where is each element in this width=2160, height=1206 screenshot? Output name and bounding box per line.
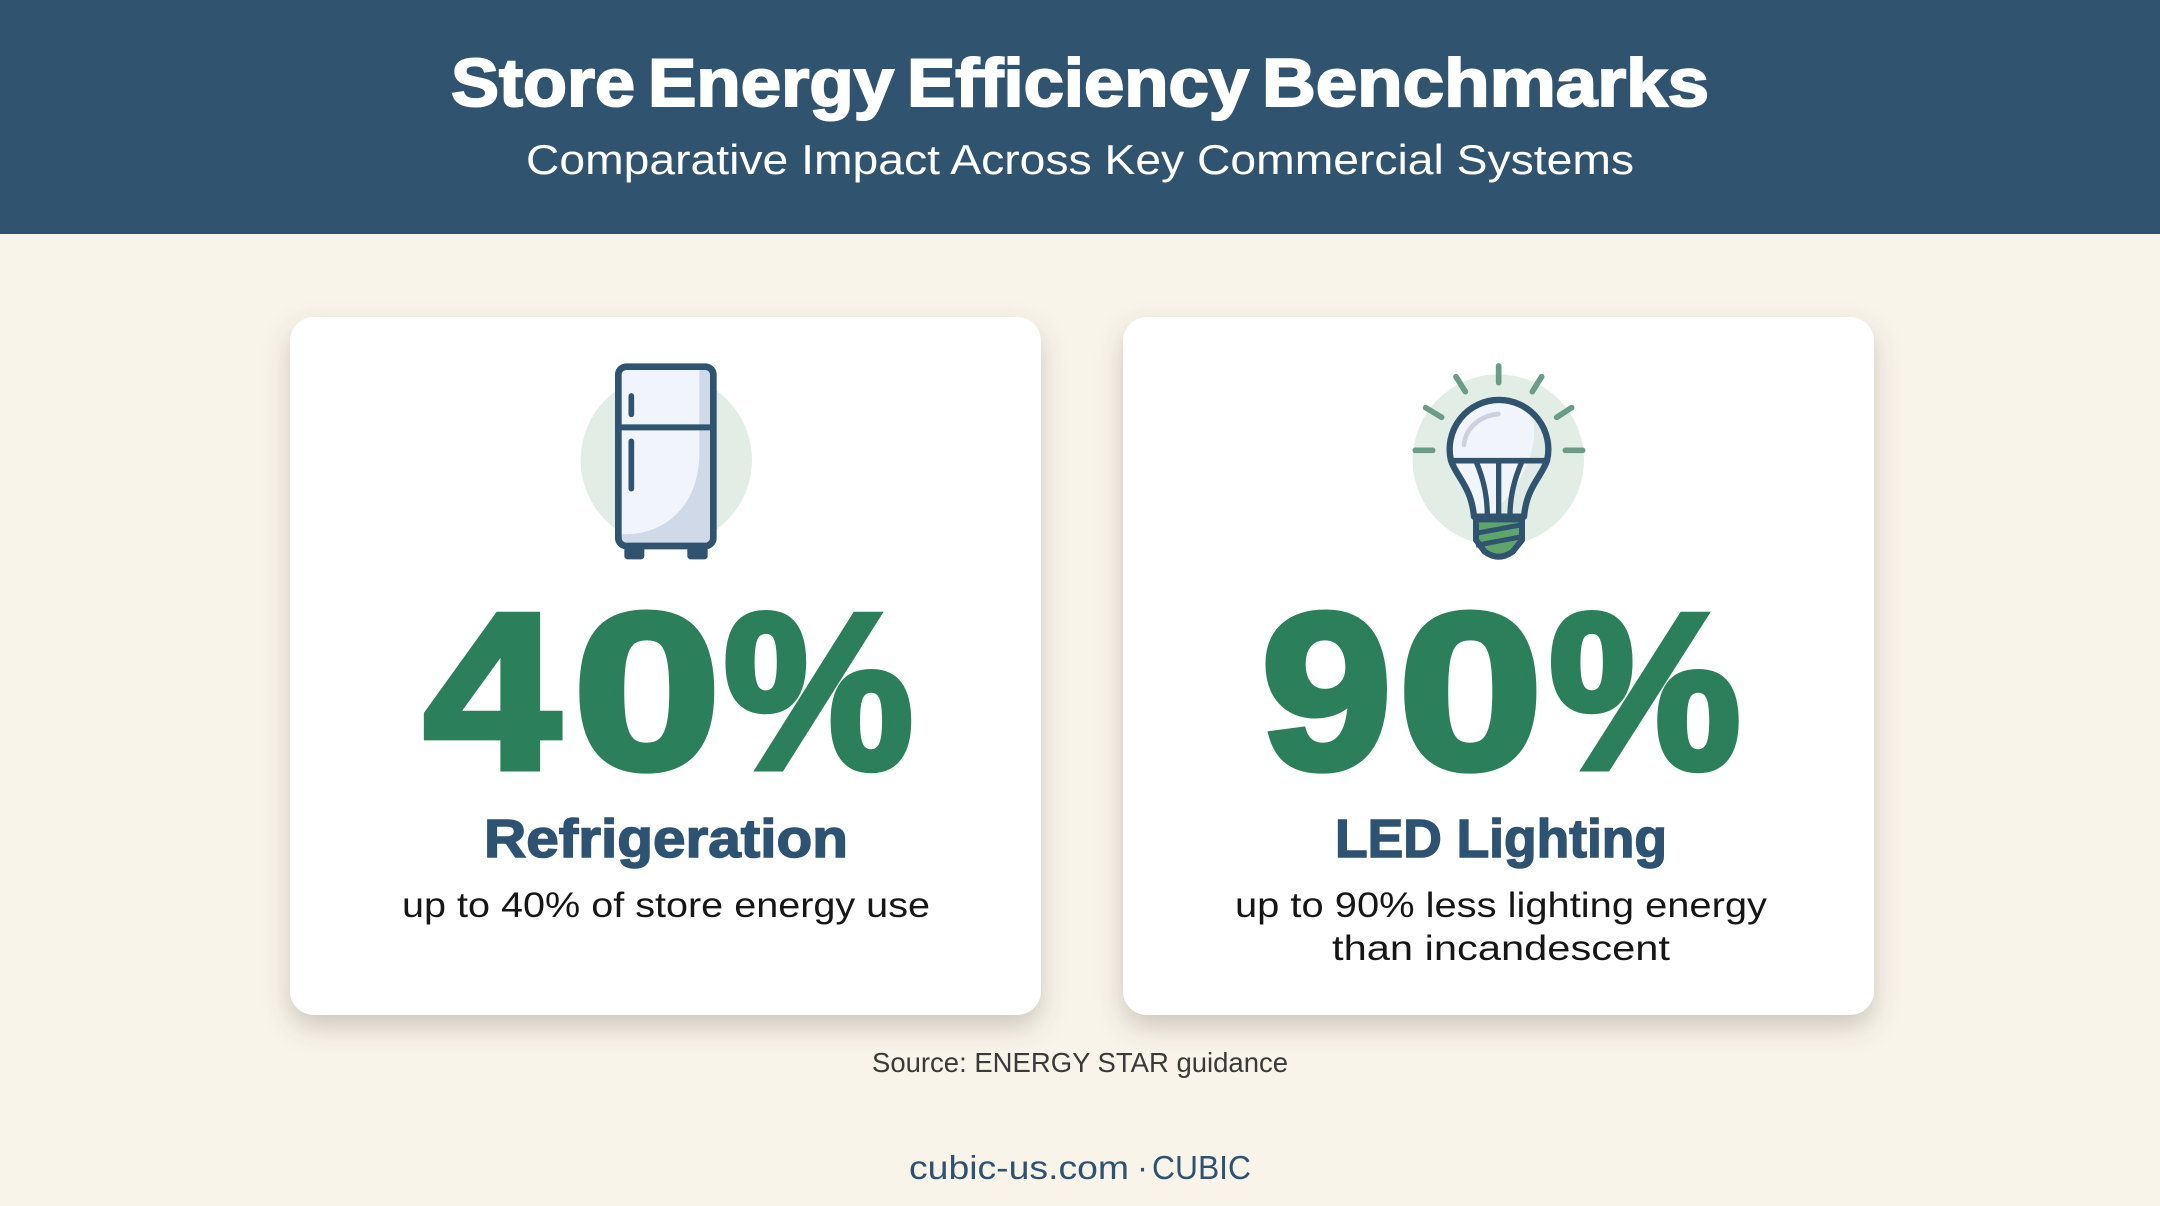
icon: light bulb (1413, 366, 1584, 557)
description: up to 90% less lighting energy (1235, 886, 1768, 925)
big number 40%: 0 (573, 568, 721, 816)
footer: · (1137, 1149, 1148, 1186)
footer: cubic-us.com (909, 1149, 1129, 1186)
title: Benchmarks (1262, 45, 1709, 121)
big number 90%: 9 (1261, 568, 1392, 816)
footer: CUBIC (1152, 1149, 1251, 1186)
panel: refrigeration (290, 317, 1041, 1015)
title: Energy (648, 45, 894, 121)
big number 90%: % (1549, 568, 1741, 816)
source note: Source: ENERGY STAR guidance (872, 1047, 1288, 1078)
label: Refrigeration: Refrigeration (484, 809, 848, 869)
big number 40%: % (724, 568, 914, 816)
big number 90%: 0 (1398, 568, 1543, 816)
title: Store (451, 45, 635, 121)
subtitle: Comparative Impact Across Key Commercial Systems (526, 136, 1634, 183)
big number 40%: 4 (424, 568, 560, 816)
description: up to 40% of store energy use (402, 886, 930, 925)
description (1235, 886, 1768, 968)
header band (0, 0, 2160, 234)
description: than incandescent (1332, 929, 1670, 968)
panel: LED lighting (1123, 317, 1874, 1015)
icon: refrigerator (581, 367, 752, 559)
label: LED Lighting: LED Lighting (1335, 809, 1667, 869)
title: Efficiency (907, 45, 1249, 121)
